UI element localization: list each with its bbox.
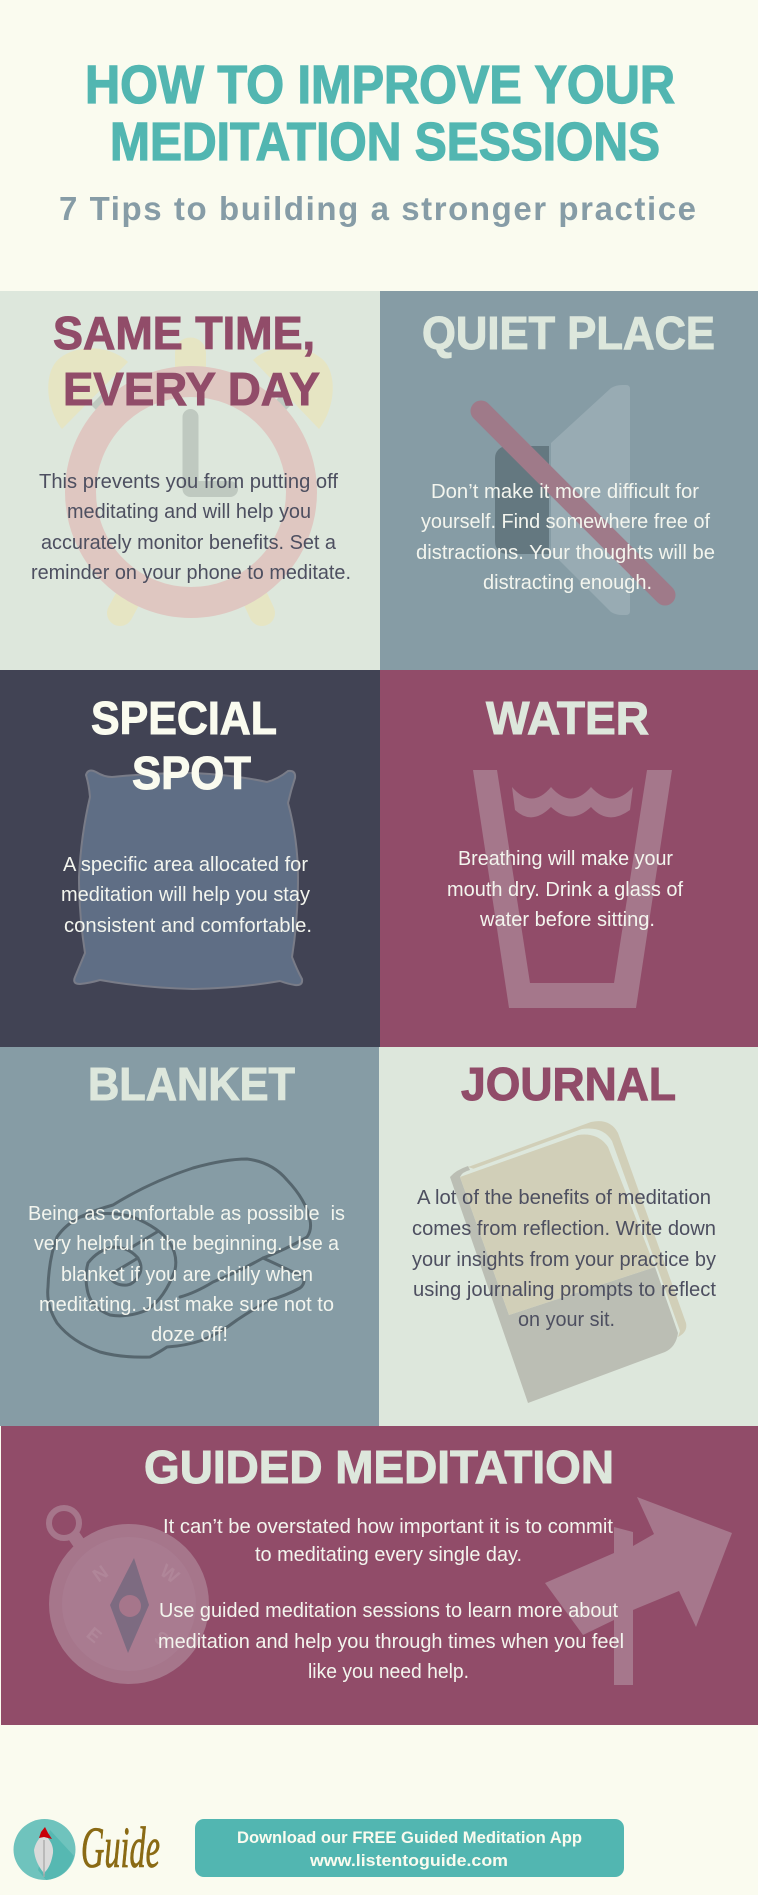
text: journal body: comes from reflection. Write down	[412, 1217, 716, 1240]
text: water body	[447, 847, 683, 931]
text: blanket body: Being as comfortable as possible is	[28, 1202, 345, 1225]
text: same time body	[31, 470, 351, 584]
icon: pillow	[74, 771, 302, 989]
text: water body: water before sitting.	[479, 908, 655, 931]
text: guided meditation body: meditation and help you through times when you feel	[158, 1630, 624, 1653]
text: guided meditation body	[158, 1515, 624, 1683]
text: same time body: reminder on your phone to meditate.	[31, 561, 351, 584]
text: blanket body: blanket if you are chilly when	[61, 1263, 313, 1286]
text: blanket body: very helpful in the beginning. Use a	[34, 1232, 340, 1255]
heading: water: WATER	[486, 692, 649, 744]
icon: journal book	[450, 1121, 686, 1403]
text: journal body: on your sit.	[518, 1308, 615, 1331]
text: journal body: A lot of the benefits of meditation	[417, 1186, 711, 1209]
text: quiet place body: distractions. Your thoughts will be	[416, 541, 715, 564]
heading: guided meditation: GUIDED MEDITATION	[144, 1441, 614, 1493]
icon: compass: S	[150, 1627, 172, 1652]
heading: blanket: BLANKET	[88, 1058, 295, 1110]
heading: quiet place: QUIET PLACE	[422, 307, 715, 359]
panel: quiet place	[380, 291, 758, 670]
heading: same time, every day: SAME TIME,	[53, 307, 315, 359]
icon: compass: W	[156, 1561, 183, 1588]
icon: compass	[49, 1508, 209, 1684]
title	[85, 55, 675, 172]
text: quiet place body: distracting enough.	[483, 571, 652, 594]
button: download app: www.listentoguide.com	[309, 1851, 508, 1870]
text: blanket body: meditating. Just make sure not to	[39, 1293, 334, 1316]
title: HOW TO IMPROVE YOUR	[85, 55, 675, 115]
icon: rolled blanket	[48, 1159, 311, 1357]
icon: direction sign arrow	[545, 1497, 732, 1685]
icon: compass: E	[82, 1624, 105, 1648]
text: guided meditation body: Use guided meditation sessions to learn more about	[159, 1599, 618, 1622]
text: blanket body: doze off!	[151, 1323, 228, 1346]
icon: compass: N	[89, 1562, 112, 1587]
icon: glass of water	[473, 770, 672, 1008]
text: same time body: This prevents you from putting off	[39, 470, 338, 493]
panel: water	[380, 670, 758, 1047]
panel: same time, every day	[0, 291, 380, 670]
panel: journal	[379, 1047, 758, 1426]
button: download app: Download our FREE Guided Meditation App	[237, 1828, 582, 1847]
text: special spot body: meditation will help you stay	[61, 883, 311, 906]
heading: same time, every day: EVERY DAY	[63, 363, 320, 415]
panel: blanket	[0, 1047, 379, 1426]
text: water body: Breathing will make your	[458, 847, 673, 870]
heading: special spot: SPOT	[132, 747, 251, 799]
text: quiet place body	[416, 480, 715, 594]
text: same time body: meditating and will help you	[67, 500, 311, 523]
text: same time body: accurately monitor benefits. Set a	[41, 531, 337, 554]
subtitle: 7 Tips to building a stronger practice	[59, 190, 696, 227]
text: journal body: using journaling prompts to reflect	[413, 1278, 716, 1301]
icon: muted speaker	[481, 385, 665, 615]
icon: alarm clock	[48, 338, 333, 613]
icon: feather badge	[14, 1819, 76, 1880]
text: water body: mouth dry. Drink a glass of	[447, 878, 683, 901]
heading: special spot	[91, 692, 277, 799]
text: blanket body	[28, 1202, 345, 1346]
text: journal body	[412, 1186, 717, 1331]
panel: special spot	[0, 670, 380, 1047]
heading: journal: JOURNAL	[461, 1058, 676, 1110]
text: special spot body	[61, 853, 312, 937]
text: guided meditation body: like you need help.	[308, 1660, 469, 1683]
text: special spot body: consistent and comfortable.	[64, 914, 312, 937]
heading: special spot: SPECIAL	[91, 692, 277, 744]
text: journal body: your insights from your practice by	[412, 1248, 717, 1271]
wordmark: guide: Guide	[81, 1815, 160, 1880]
text: quiet place body: Don’t make it more difficult for	[431, 480, 699, 503]
text: guided meditation body: to meditating every single day.	[255, 1543, 522, 1566]
text: special spot body: A specific area allocated for	[63, 853, 308, 876]
text: guided meditation body: It can’t be overstated how important it is to commit	[163, 1515, 613, 1538]
heading: same time, every day	[53, 307, 320, 415]
text: quiet place body: yourself. Find somewhere free of	[421, 510, 710, 533]
panel: guided meditation	[1, 1426, 758, 1725]
button: download app	[195, 1819, 624, 1877]
logo: guide	[14, 1815, 160, 1880]
title: MEDITATION SESSIONS	[110, 112, 660, 172]
